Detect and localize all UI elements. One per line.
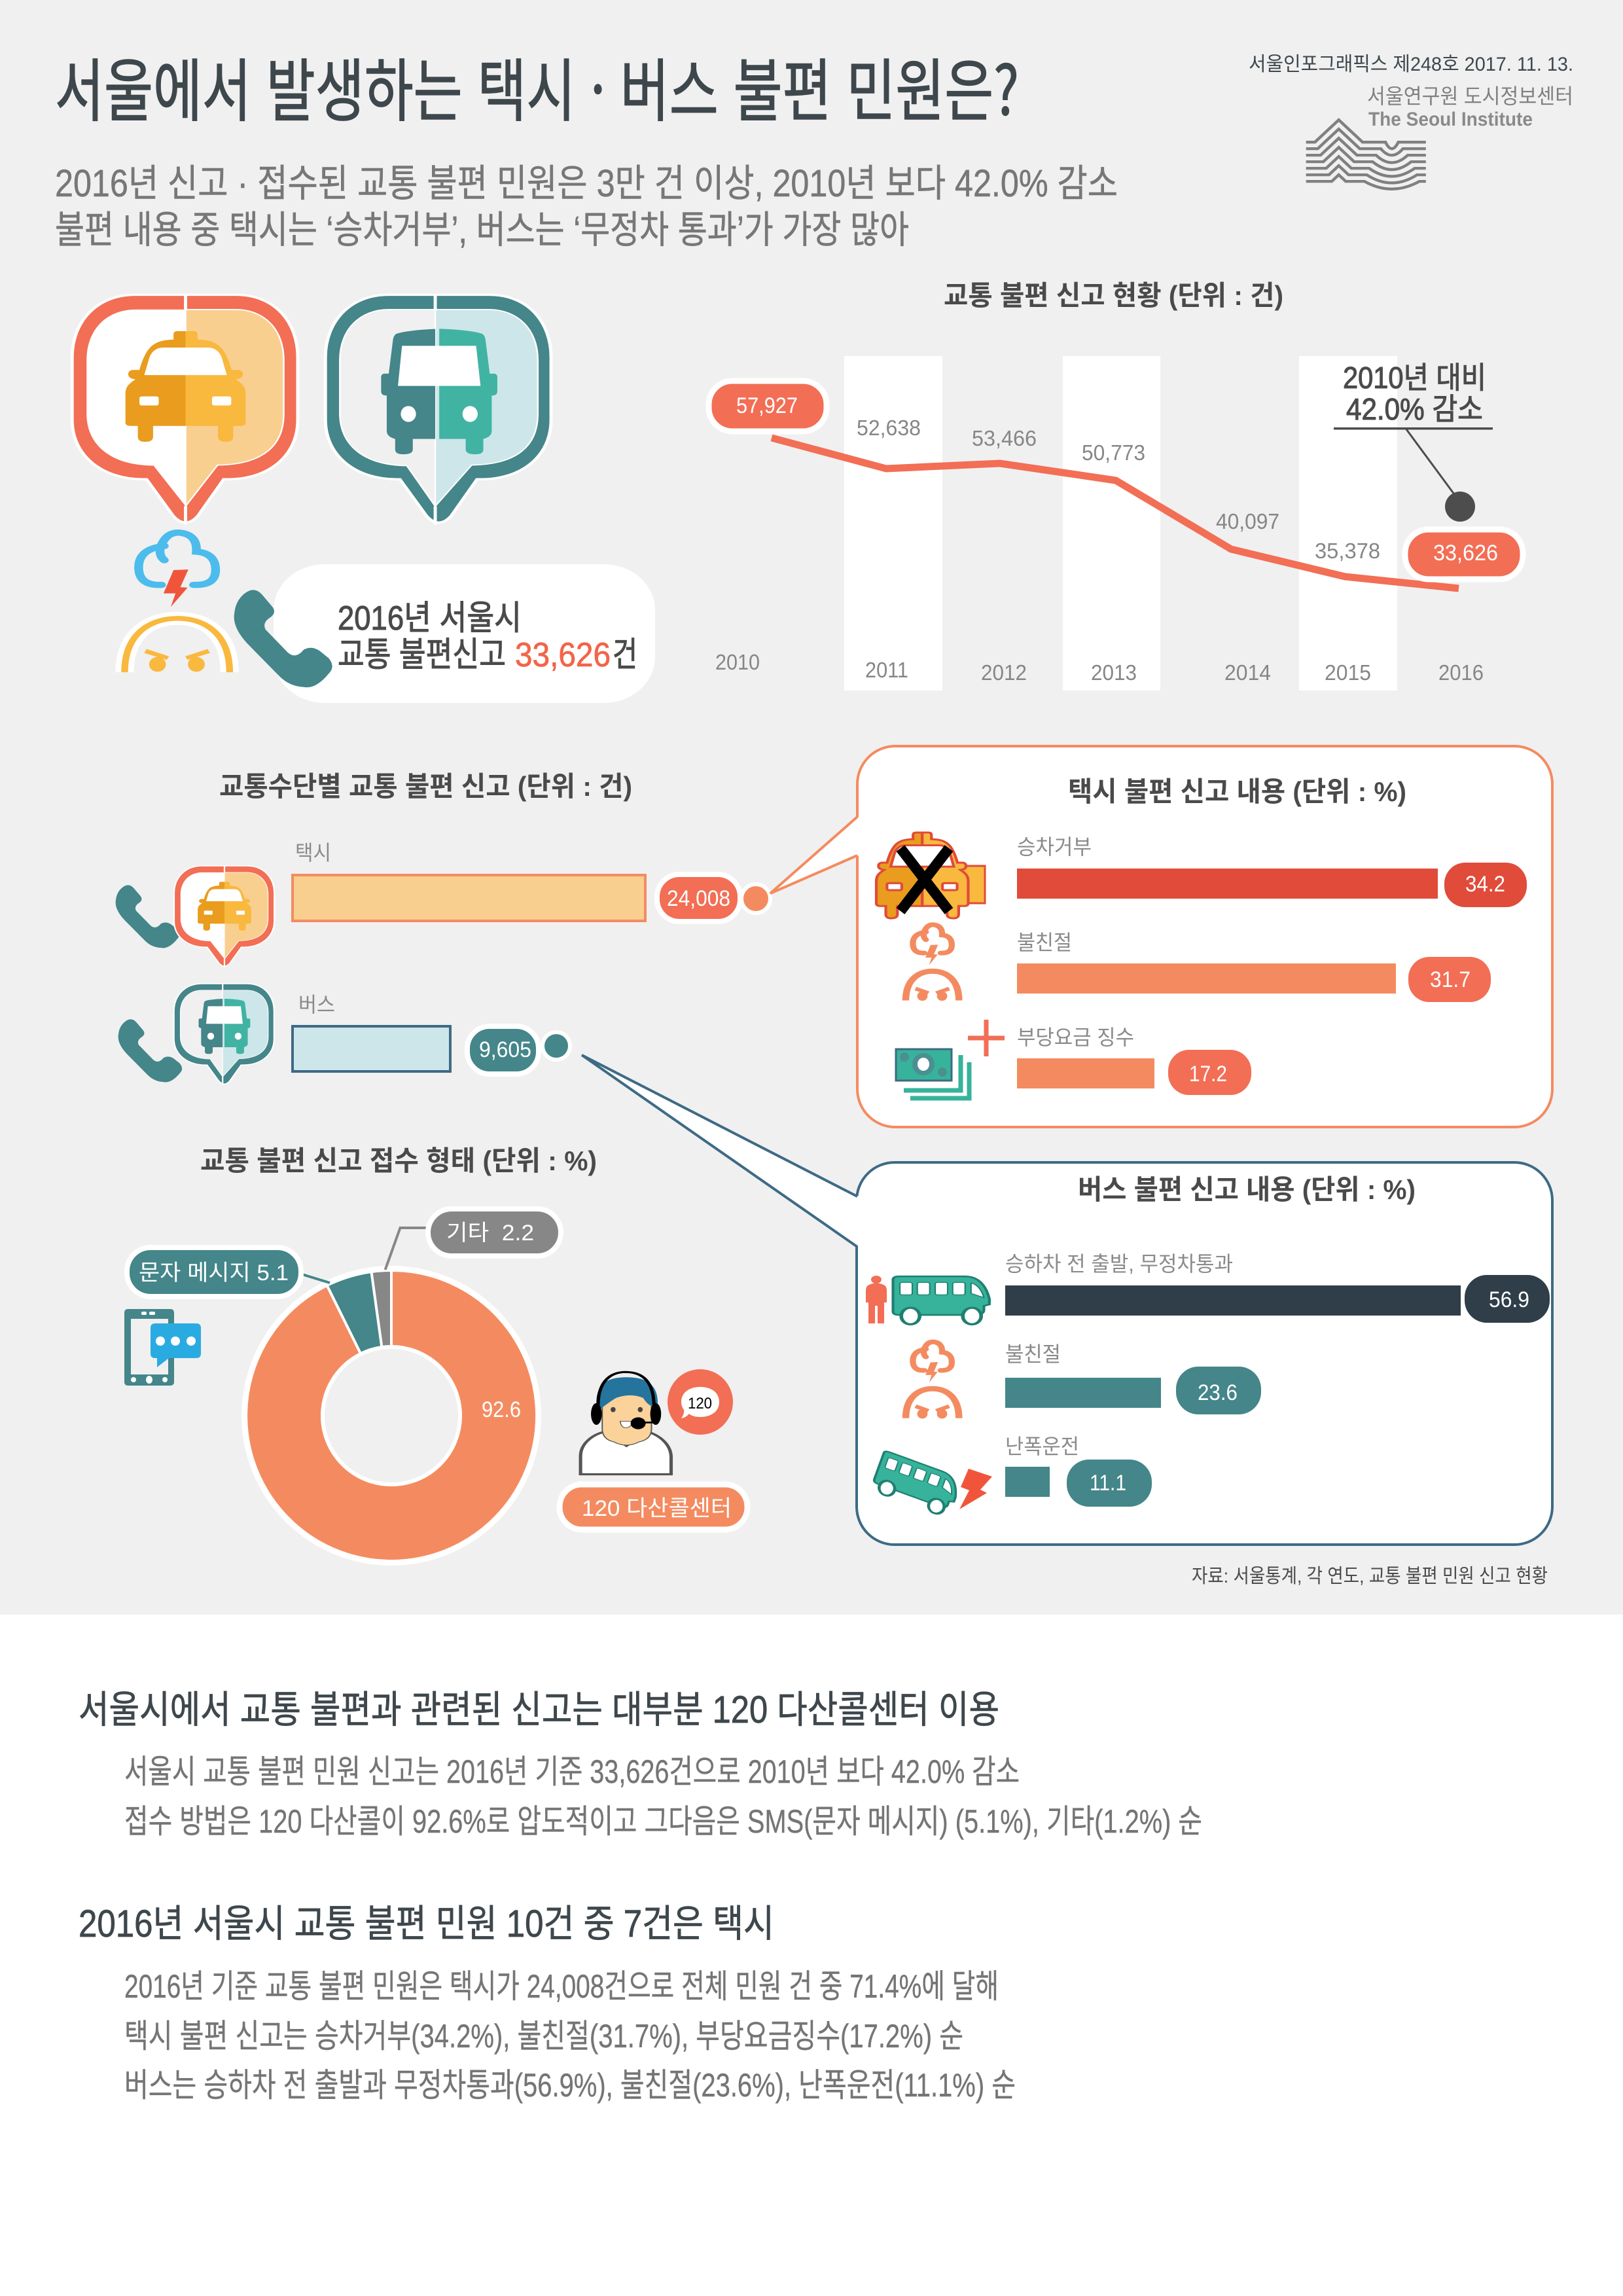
icon: angry face [906, 925, 959, 1000]
line chart: reports per year: 2015 [1325, 660, 1371, 685]
value: bus count: 9,605 [479, 1037, 531, 1062]
value: taxi count: 24,008 [667, 886, 730, 911]
row: overcharging [1017, 1026, 1251, 1095]
title: 서울에서 발생하는 택시 · 버스 불편 민원은? [55, 36, 1019, 135]
row: departure before boarding: 승하차 전 출발, 무정차통과 [1005, 1252, 1233, 1276]
institute name: 서울연구원 도시정보센터 [1367, 84, 1573, 108]
callout: 2016 total reports [274, 564, 655, 703]
line chart: reports per year: 2011 [865, 658, 908, 682]
icon: bus speech bubble [325, 275, 551, 525]
page background [0, 0, 1623, 1615]
icon: 120 badge [668, 1369, 733, 1435]
callout: 2016 total reports: 33,626 [515, 636, 611, 674]
row: overcharging: 부당요금 징수 [1017, 1026, 1134, 1049]
line chart: reports per year: 2014 [1224, 660, 1271, 685]
text block: taxi summary: 택시 불편 신고는 승차거부(34.2%), 불친절(31.7%), 부당요금징수(17.2%) 순 [124, 2018, 963, 2054]
line chart: reports per year: 2012 [981, 660, 1027, 685]
panel: bus complaints [582, 1055, 1552, 1545]
label: 120 call center: 120 다산콜센터 [582, 1496, 732, 1521]
icon: angry face with thunder cloud [124, 533, 230, 672]
label: taxi: 택시 [295, 841, 331, 865]
row: unkindness: 23.6 [1198, 1380, 1238, 1405]
line chart: reports per year: 33,626 [1433, 541, 1498, 565]
text block: call center summary: 서울시 교통 불편 민원 신고는 2016년 기준 33,626건으로 2010년 보다 42.0% 감소 [124, 1753, 1020, 1790]
text block: taxi summary: 버스는 승하차 전 출발과 무정차통과(56.9%), 불친절(23.6%), 난폭운전(11.1%) 순 [124, 2067, 1016, 2104]
subtitle: 불편 내용 중 택시는 ‘승차거부’, 버스는 ‘무정차 통과’가 가장 많아 [55, 209, 909, 251]
panel heading: bus: 버스 불편 신고 내용 (단위 : %) [1078, 1174, 1416, 1205]
row: refusal: 34.2 [1465, 872, 1505, 897]
line chart: reports per year: 53,466 [972, 426, 1037, 450]
icon: small phone taxi [116, 885, 179, 948]
callout: other share [385, 1209, 561, 1270]
heading: transport mode chart: 교통수단별 교통 불편 신고 (단위 : 건) [219, 771, 632, 802]
line chart: reports per year: 35,378 [1315, 539, 1380, 563]
institute name: The Seoul Institute [1368, 109, 1533, 130]
line chart: reports per year: 2013 [1091, 660, 1137, 685]
row: unkindness: 불친절 [1017, 931, 1072, 954]
panel heading: taxi: 택시 불편 신고 내용 (단위 : %) [1068, 776, 1406, 807]
callout: 42% decrease: 2010년 대비 [1343, 361, 1486, 395]
icon: phone handset [234, 590, 332, 687]
label: 120 call center [560, 1484, 747, 1530]
row: unkindness: 31.7 [1430, 967, 1471, 992]
callout: 2016 total reports: 2016년 서울시 [338, 600, 522, 637]
institute name [1367, 84, 1573, 130]
icon: taxi refusal cross [876, 833, 985, 918]
row: departure before boarding: 56.9 [1489, 1287, 1529, 1312]
heading: donut chart: 교통 불편 신고 접수 형태 (단위 : %) [200, 1145, 597, 1176]
icon: phone with message [124, 1309, 201, 1386]
callout: text message share: 문자 메시지 5.1 [139, 1261, 289, 1285]
label: bus: 버스 [298, 993, 335, 1016]
callout tail: taxi [770, 817, 859, 893]
line chart: reports per year: 52,638 [857, 416, 921, 440]
text block: call center summary [79, 1689, 1202, 1840]
callout: 42% decrease [1334, 361, 1493, 522]
publication info: 서울인포그래픽스 제248호 2017. 11. 13. [1249, 54, 1573, 75]
callout: 2016 total reports: 교통 불편신고 [338, 636, 506, 674]
line chart: reports per year: 40,097 [1216, 509, 1279, 533]
subtitle [55, 162, 1118, 251]
line chart: reports per year: 2010 [715, 650, 760, 674]
line chart: reports per year: 50,773 [1082, 440, 1145, 465]
heading: line chart: 교통 불편 신고 현황 (단위 : 건) [944, 280, 1283, 311]
icon: seoul institute logo [1306, 120, 1426, 189]
icon: money with plus [896, 1020, 1005, 1098]
panel: taxi complaints [770, 746, 1552, 1127]
value: taxi count [657, 874, 770, 922]
icon: angry face [906, 1342, 959, 1418]
text block: call center summary: 접수 방법은 120 다산콜이 92.6%로 압도적이고 그다음은 SMS(문자 메시지) (5.1%), 기타(1.2%) 순 [124, 1803, 1202, 1840]
line chart: reports per year: 2016 [1438, 660, 1484, 685]
row: reckless driving [1005, 1435, 1152, 1507]
row: unkindness [1017, 931, 1491, 1002]
callout: 42% decrease: 42.0% 감소 [1346, 392, 1483, 426]
icon: 120 badge: 120 [688, 1395, 712, 1412]
text block: taxi summary: 2016년 기준 교통 불편 민원은 택시가 24,008건으로 전체 민원 건 중 71.4%에 달해 [124, 1968, 999, 2005]
donut chart: report channels: 92.6 [482, 1397, 521, 1422]
text block: taxi summary [79, 1903, 1016, 2104]
callout: 2016 total reports: 건 [613, 636, 637, 674]
text block: taxi summary: 2016년 서울시 교통 불편 민원 10건 중 7건은 택시 [79, 1903, 774, 1945]
subtitle: 2016년 신고 · 접수된 교통 불편 민원은 3만 건 이상, 2010년 보다 42.0% 감소 [55, 162, 1118, 205]
source note: 자료: 서울통계, 각 연도, 교통 불편 민원 신고 현황 [1192, 1566, 1548, 1587]
row: reckless driving: 난폭운전 [1005, 1435, 1079, 1458]
row: reckless driving: 11.1 [1090, 1471, 1126, 1496]
icon: small taxi bubble [174, 866, 274, 967]
row: unkindness: 불친절 [1005, 1342, 1061, 1366]
callout: text message share [127, 1247, 330, 1297]
row: overcharging: 17.2 [1189, 1062, 1227, 1086]
text block: call center summary: 서울시에서 교통 불편과 관련된 신고는 대부분 120 다산콜센터 이용 [79, 1689, 999, 1731]
icon: small phone bus [118, 1019, 182, 1082]
row: departure before boarding [1005, 1252, 1550, 1323]
row: refusal [1017, 835, 1527, 907]
line chart: reports per year: 57,927 [736, 393, 798, 418]
callout tail: bus [582, 1055, 859, 1247]
row: refusal: 승차거부 [1017, 835, 1092, 859]
icon: small bus bubble [174, 975, 274, 1085]
icon: taxi speech bubble [72, 294, 298, 525]
line chart: reports per year [709, 356, 1523, 691]
bar: taxi count [293, 875, 645, 921]
callout: other share: 기타 2.2 [446, 1221, 534, 1246]
bar: bus count [293, 1026, 450, 1071]
value: bus count [467, 1026, 570, 1074]
row: unkindness [1005, 1342, 1261, 1414]
icon: person and bus [866, 1276, 990, 1324]
icon: call center agent [580, 1372, 671, 1475]
icon: reckless bus [870, 1450, 992, 1518]
donut chart: report channels [241, 1266, 541, 1566]
